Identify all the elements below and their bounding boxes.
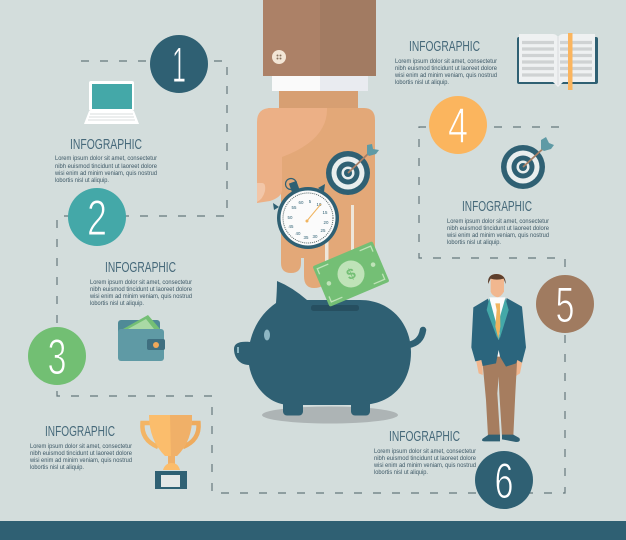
number 2: 2 (87, 190, 107, 246)
text block 2: wisi enim ad minim veniam, quis nostrud (89, 293, 192, 300)
text block 6: Lorem ipsum dolor sit amet, consectetur (374, 448, 477, 455)
icon: stopwatch: 15 (323, 210, 328, 215)
thumb (257, 108, 327, 203)
number 1 (150, 35, 208, 93)
icon: stopwatch: 50 (288, 215, 293, 220)
finger gap middle (325, 240, 328, 276)
cuff button (272, 50, 286, 64)
icon: trophy (142, 415, 199, 489)
icon: wallet (118, 315, 165, 361)
text block 1: wisi enim ad minim veniam, quis nostrud (54, 170, 157, 177)
icon: banknote (312, 241, 390, 307)
icon: stopwatch: 10 (317, 202, 322, 207)
icon: stopwatch: 20 (324, 220, 329, 225)
text block 4: nibh euismod tincidunt ut laoreet dolore (395, 65, 497, 72)
shoes (482, 435, 520, 442)
icon: laptop (84, 81, 139, 124)
palm and fingers (268, 108, 375, 288)
text block 6 (373, 428, 477, 476)
number 6 (475, 451, 533, 509)
icon: stopwatch: 40 (296, 231, 301, 236)
icon: stopwatch: 25 (321, 228, 326, 233)
number 3: 3 (48, 329, 66, 385)
neck and head (491, 274, 504, 297)
text block 2: Lorem ipsum dolor sit amet, consectetur (90, 279, 193, 286)
text block 5: nibh euismod tincidunt ut laoreet dolore (447, 225, 549, 232)
text block 6: wisi enim ad minim veniam, quis nostrud (373, 462, 476, 469)
text block 6: INFOGRAPHIC (389, 428, 460, 445)
number 5: 5 (556, 277, 574, 333)
text block 4: Lorem ipsum dolor sit amet, consectetur (395, 58, 498, 65)
tie (495, 303, 500, 339)
icon: banknote: $ (344, 265, 359, 284)
text block 1: INFOGRAPHIC (70, 136, 142, 153)
text block 2: nibh euismod tincidunt ut laoreet dolore (90, 286, 192, 293)
text block 1: Lorem ipsum dolor sit amet, consectetur (55, 155, 158, 162)
hair (488, 274, 506, 284)
icon: stopwatch (273, 178, 339, 249)
text block 5: lobortis nisl ut aliquip. (447, 239, 501, 246)
icon: stopwatch: 35 (304, 235, 309, 240)
text block 3: Lorem ipsum dolor sit amet, consectetur (30, 443, 133, 450)
thumb nail (257, 183, 265, 202)
text block 3: INFOGRAPHIC (45, 423, 115, 440)
icon: stopwatch: 45 (289, 224, 294, 229)
wrist (279, 91, 358, 111)
text block 6: lobortis nisl ut aliquip. (374, 469, 428, 476)
text block 5: INFOGRAPHIC (462, 198, 532, 215)
text block 4 (394, 38, 498, 86)
pig eye (264, 330, 270, 340)
icon: stopwatch: 60 (299, 200, 304, 205)
icon: target on hand (326, 144, 379, 195)
text block 4: wisi enim ad minim veniam, quis nostrud (394, 72, 497, 79)
jacket (471, 298, 526, 367)
text block 1: lobortis nisl ut aliquip. (55, 177, 109, 184)
text block 3: wisi enim ad minim veniam, quis nostrud (29, 457, 132, 464)
icon: stopwatch: 30 (313, 234, 318, 239)
sleeve (263, 0, 376, 76)
pig nostril (237, 347, 239, 353)
shirt (489, 297, 505, 357)
finger gap right (351, 205, 354, 250)
text block 5: wisi enim ad minim veniam, quis nostrud (446, 232, 549, 239)
text block 1 (54, 136, 158, 184)
icon: open book (517, 33, 598, 90)
illustration: businessman (471, 274, 526, 442)
text block 3: lobortis nisl ut aliquip. (30, 464, 84, 471)
number 4 (429, 96, 487, 154)
text block 3: nibh euismod tincidunt ut laoreet dolore (30, 450, 132, 457)
text block 3 (29, 423, 133, 471)
text block 6: nibh euismod tincidunt ut laoreet dolore (374, 455, 476, 462)
shirt cuff (272, 76, 368, 91)
hands (476, 360, 523, 376)
number 2 (68, 188, 126, 246)
icon: target (501, 137, 554, 189)
illustration: hand with sleeve (257, 0, 376, 288)
coin slot (311, 305, 359, 311)
number 3 (28, 327, 86, 385)
text block 1: nibh euismod tincidunt ut laoreet dolore (55, 163, 157, 170)
lapels (487, 298, 509, 340)
piggy bank shadow (262, 406, 398, 424)
number 5 (536, 275, 594, 333)
text block 2: lobortis nisl ut aliquip. (90, 300, 144, 307)
illustration: piggy bank (234, 281, 423, 416)
trousers (482, 357, 517, 436)
icon: stopwatch: 5 (309, 199, 312, 204)
text block 4: lobortis nisl ut aliquip. (395, 79, 449, 86)
number 1: 1 (172, 37, 186, 93)
icon: stopwatch: 55 (292, 205, 297, 210)
number 4: 4 (448, 98, 468, 154)
text block 2 (89, 259, 193, 307)
text block 4: INFOGRAPHIC (409, 38, 480, 55)
text block 5: Lorem ipsum dolor sit amet, consectetur (447, 218, 550, 225)
number 6: 6 (494, 453, 514, 509)
text block 2: INFOGRAPHIC (105, 259, 176, 276)
bottom band (0, 521, 626, 540)
text block 5 (446, 198, 550, 246)
